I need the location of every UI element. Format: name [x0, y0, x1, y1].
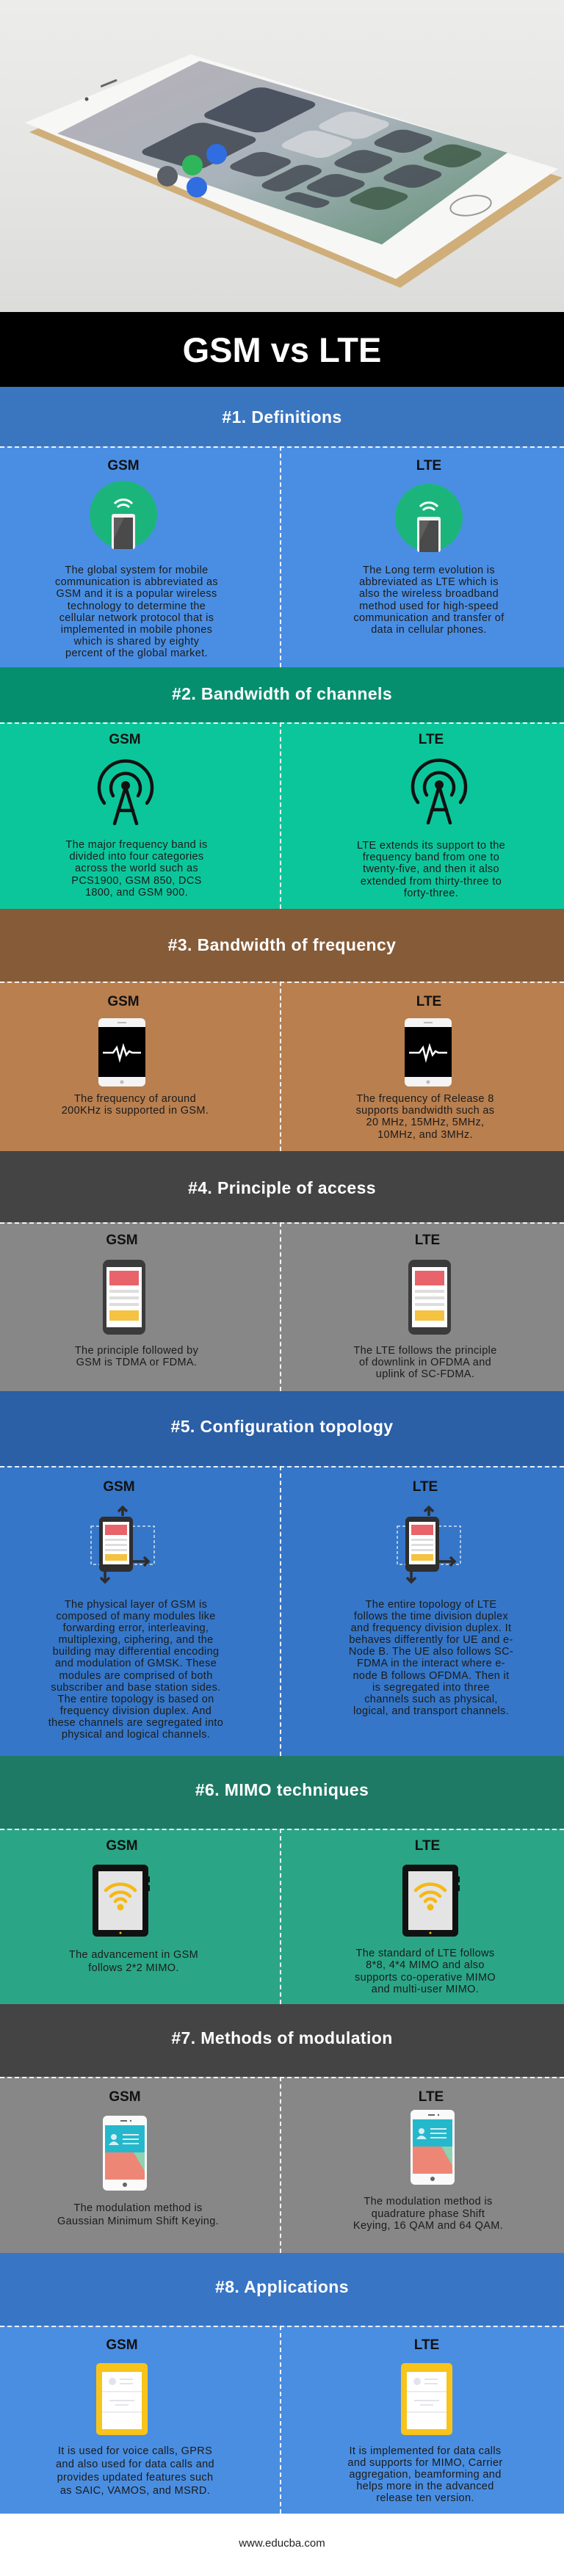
section 2 content: bandwidth of channels: extended from thirty-three to	[361, 876, 502, 888]
section 8 header: #8. Applications	[215, 2277, 349, 2296]
icon: antenna tower LTE	[411, 758, 467, 824]
icon: phone with content LTE	[408, 1260, 451, 1335]
icon: yellow phone LTE	[401, 2363, 452, 2435]
section 5 content: configuration topology: is segregated into three	[372, 1682, 490, 1694]
section 1 content: definitions: percent of the global market.	[65, 647, 208, 659]
section 6 content: MIMO techniques: supports co-operative MIMO	[355, 1972, 496, 1984]
section 4 content: principle of access: LTE	[415, 1233, 440, 1248]
section 6 content: MIMO techniques: The advancement in GSM	[69, 1949, 198, 1961]
section 2 content: bandwidth of channels: LTE extends its support to the	[357, 840, 505, 852]
icon: phone with pulse GSM	[98, 1018, 145, 1086]
icon: phone signal GSM	[90, 481, 157, 549]
section 6 content: MIMO techniques: and multi-user MIMO.	[372, 1984, 479, 1995]
section 5 content: configuration topology: composed of many modules like	[56, 1611, 216, 1622]
section 3 content: bandwidth of frequency: supports bandwidth such as	[356, 1105, 494, 1117]
section 1 content: definitions: which is shared by eighty	[74, 636, 199, 647]
section 3 content: bandwidth of frequency: The frequency of around	[74, 1093, 196, 1105]
section 6 content: MIMO techniques: follows 2*2 MIMO.	[88, 1962, 179, 1974]
section 1 content: definitions: cellular network protocol that is	[59, 612, 214, 624]
section 4 content: principle of access	[0, 1222, 564, 1391]
section 2 content: bandwidth of channels: LTE	[419, 732, 444, 747]
section 1 content: definitions: also the wireless broadband	[359, 588, 499, 600]
section 1 header: #1. Definitions	[222, 407, 342, 427]
section 5 content: configuration topology: these channels are segregated into	[48, 1717, 223, 1729]
section 4 content: principle of access: GSM	[106, 1233, 138, 1248]
section 5 content: configuration topology: The physical layer of GSM is	[65, 1599, 207, 1611]
section 1 content: definitions: communication is abbreviated as	[55, 576, 218, 588]
section 5 content: configuration topology: physical and logical channels.	[62, 1729, 210, 1741]
section 3 content: bandwidth of frequency: GSM	[107, 994, 140, 1009]
icon: tablet wifi GSM	[93, 1865, 150, 1937]
section 4 header: #4. Principle of access	[188, 1178, 376, 1197]
section 2 content: bandwidth of channels: The major frequency band is	[65, 839, 208, 851]
section 6 header: #6. MIMO techniques	[195, 1780, 369, 1799]
section 2 header: #2. Bandwidth of channels	[172, 684, 392, 703]
section 3 content: bandwidth of frequency: 10MHz, and 3MHz.	[377, 1129, 473, 1141]
section 2 content: bandwidth of channels	[0, 722, 564, 909]
section 8 content: applications	[0, 2326, 564, 2514]
section 8 content: applications: and supports for MIMO, Carrier	[347, 2457, 503, 2469]
section 7 content: methods of modulation	[0, 2077, 564, 2253]
section 7 header: #7. Methods of modulation	[171, 2028, 393, 2047]
section 1 header	[0, 387, 564, 446]
section 8 content: applications: It is implemented for data calls	[349, 2445, 502, 2457]
section 5 content: configuration topology: The entire topology of LTE	[366, 1599, 496, 1611]
icon: tablet wifi LTE	[402, 1865, 460, 1937]
section 2 content: bandwidth of channels: 1800, and GSM 900.	[85, 887, 188, 899]
section 4 content: principle of access: uplink of SC-FDMA.	[376, 1368, 474, 1380]
section 1 content: definitions: GSM and it is a popular wireless	[56, 588, 217, 600]
section 2 content: bandwidth of channels: PCS1900, GSM 850, DCS	[71, 875, 202, 887]
section 2 content: bandwidth of channels: GSM	[109, 732, 141, 747]
section 7 header	[0, 2004, 564, 2077]
icon: antenna tower GSM	[97, 759, 154, 825]
hero photo: phone on table	[0, 0, 564, 312]
section 5 content: configuration topology: LTE	[413, 1479, 438, 1495]
section 5 content: configuration topology: building may differential encoding	[53, 1646, 219, 1658]
section 7 content: methods of modulation: LTE	[419, 2089, 444, 2105]
section 2 content: bandwidth of channels: across the world such as	[75, 863, 198, 874]
section 1 content: definitions: The Long term evolution is	[363, 565, 495, 576]
section 5 content: configuration topology: follows the time division duplex	[354, 1611, 508, 1622]
section 8 content: applications: release ten version.	[376, 2492, 474, 2504]
section 6 content: MIMO techniques: The standard of LTE follows	[356, 1948, 494, 1959]
section 5 content: configuration topology: GSM	[103, 1479, 135, 1495]
section 5 content: configuration topology: behaves differently for UE and e-	[349, 1634, 513, 1646]
section 7 content: methods of modulation: quadrature phase Shift	[372, 2208, 485, 2220]
section 5 content: configuration topology: The entire topology is based on	[57, 1694, 214, 1705]
icon: phone with content GSM	[103, 1260, 145, 1335]
section 5 content: configuration topology: node B follows OFDMA. Then it	[353, 1670, 509, 1682]
section 7 content: methods of modulation: GSM	[109, 2089, 141, 2105]
section 2 header	[0, 667, 564, 722]
section 1 content: definitions: abbreviated as LTE which is	[359, 576, 499, 588]
section 3 content: bandwidth of frequency	[0, 982, 564, 1151]
section 5 content: configuration topology: channels such as physical,	[364, 1694, 498, 1705]
main title banner	[0, 312, 564, 387]
section 8 content: applications: aggregation, beamforming and	[349, 2469, 502, 2481]
section 4 content: principle of access: The principle followed by	[75, 1345, 198, 1357]
section 5 content: configuration topology: logical, and transport channels.	[353, 1705, 509, 1717]
section 3 header: #3. Bandwidth of frequency	[168, 935, 396, 954]
section 1 content: definitions: The global system for mobile	[65, 565, 209, 576]
section 5 header	[0, 1391, 564, 1466]
section 1 content: definitions: GSM	[107, 458, 140, 474]
section 1 content: definitions	[0, 446, 564, 667]
section 3 content: bandwidth of frequency: 200KHz is supported in GSM.	[62, 1105, 209, 1117]
section 5 content: configuration topology: and frequency division duplex. It	[351, 1622, 511, 1634]
section 8 content: applications: GSM	[106, 2337, 138, 2353]
section 7 content: methods of modulation: Keying, 16 QAM and 64 QAM.	[353, 2220, 503, 2232]
section 5 content: configuration topology: multiplexing, ciphering, and the	[58, 1634, 214, 1646]
section 3 content: bandwidth of frequency: The frequency of Release 8	[356, 1093, 494, 1105]
section 5 content: configuration topology: FDMA in the interact where e-	[357, 1658, 505, 1669]
section 5 content: configuration topology: forwarding error, interleaving,	[63, 1622, 209, 1634]
section 5 content: configuration topology: modules are comprised of both	[59, 1670, 213, 1682]
section 8 content: applications: LTE	[414, 2337, 439, 2353]
section 5 content: configuration topology: subscriber and base station sides.	[51, 1682, 221, 1694]
section 1 content: definitions: LTE	[416, 458, 441, 474]
section 8 content: applications: helps more in the advanced	[356, 2481, 494, 2492]
section 2 content: bandwidth of channels: frequency band from one to	[363, 852, 499, 863]
section 8 content: applications: as SAIC, VAMOS, and MSRD.	[60, 2485, 210, 2497]
section 6 content: MIMO techniques	[0, 1829, 564, 2004]
section 4 content: principle of access: of downlink in OFDMA and	[359, 1357, 491, 1368]
section 7 content: methods of modulation: The modulation method is	[73, 2202, 203, 2214]
section 4 header	[0, 1151, 564, 1222]
section 6 content: MIMO techniques: GSM	[106, 1838, 138, 1854]
section 7 content: methods of modulation: The modulation method is	[364, 2196, 493, 2207]
section 6 header	[0, 1756, 564, 1829]
section 8 header	[0, 2253, 564, 2326]
icon: yellow phone GSM	[96, 2363, 148, 2435]
footer: website: www.educba.com	[239, 2537, 325, 2550]
icon: rotating phone LTE	[397, 1506, 461, 1584]
section 1 content: definitions: technology to determine the	[68, 601, 206, 612]
main title banner: GSM vs LTE	[183, 330, 381, 369]
section 5 content: configuration topology: and modulation of GMSK. These	[55, 1658, 217, 1669]
section 3 content: bandwidth of frequency: LTE	[416, 994, 441, 1009]
section 4 content: principle of access: The LTE follows the principle	[353, 1345, 497, 1357]
section 1 content: definitions: implemented in mobile phones	[61, 624, 212, 636]
section 4 content: principle of access: GSM is TDMA or FDMA.	[76, 1357, 197, 1368]
icon: profile phone GSM	[103, 2116, 147, 2191]
icon: phone with pulse LTE	[405, 1018, 452, 1086]
section 8 content: applications: and also used for data calls and	[56, 2459, 214, 2470]
section 3 header	[0, 909, 564, 982]
icon: phone signal LTE	[395, 484, 463, 552]
section 5 content: configuration topology: Node B. The UE also follows SC-	[349, 1646, 513, 1658]
section 6 content: MIMO techniques: 8*8, 4*4 MIMO and also	[366, 1959, 485, 1971]
section 5 header: #5. Configuration topology	[170, 1417, 394, 1436]
icon: profile phone LTE	[411, 2110, 455, 2185]
section 1 content: definitions: method used for high-speed	[359, 601, 499, 612]
section 1 content: definitions: communication and transfer of	[353, 612, 505, 624]
icon: rotating phone GSM	[90, 1506, 155, 1584]
section 8 content: applications: provides updated features such	[57, 2472, 213, 2484]
section 7 content: methods of modulation: Gaussian Minimum Shift Keying.	[57, 2216, 219, 2227]
section 5 content: configuration topology	[0, 1466, 564, 1756]
section 2 content: bandwidth of channels: divided into four categories	[69, 851, 204, 863]
section 6 content: MIMO techniques: LTE	[415, 1838, 440, 1854]
section 2 content: bandwidth of channels: forty-three.	[404, 888, 458, 899]
section 2 content: bandwidth of channels: twenty-five, and then it also	[363, 863, 499, 875]
section 5 content: configuration topology: frequency division duplex. And	[60, 1705, 212, 1717]
section 8 content: applications: It is used for voice calls, GPRS	[58, 2445, 212, 2457]
section 3 content: bandwidth of frequency: 20 MHz, 15MHz, 5MHz,	[366, 1117, 484, 1128]
section 1 content: definitions: data in cellular phones.	[371, 624, 487, 636]
